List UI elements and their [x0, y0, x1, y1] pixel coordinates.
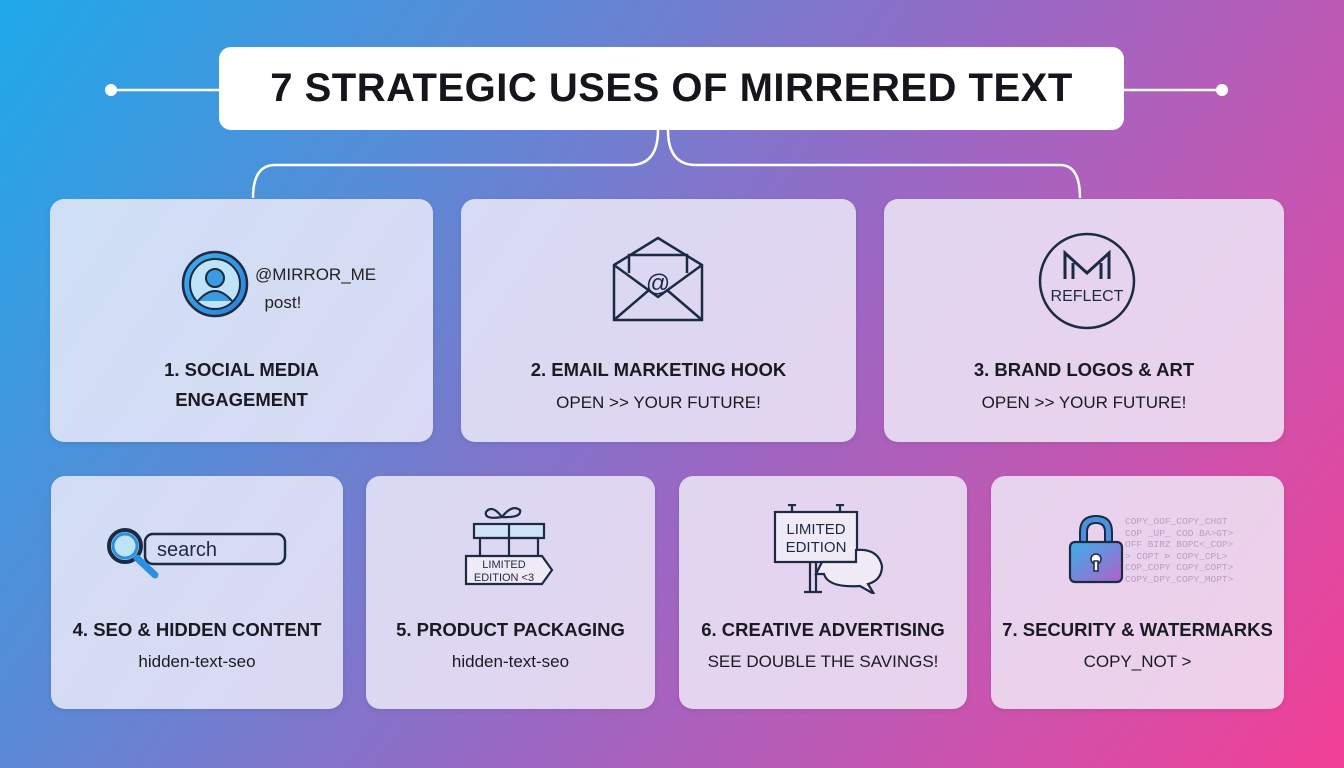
panel: seo — [51, 476, 343, 709]
heading: ENGAGEMENT — [175, 389, 308, 410]
heading: 6. CREATIVE ADVERTISING — [701, 619, 945, 640]
title — [219, 47, 1124, 130]
panel: packaging — [366, 476, 655, 709]
icon: billboard — [774, 504, 884, 594]
text: handle — [255, 265, 376, 312]
text: faded watermark: COP_COPY COPY_COPT> — [1125, 562, 1233, 573]
text: faded watermark: COPY_DPY_COPY_MOPT> — [1125, 574, 1233, 584]
panel: packaging: hidden-text-seo — [452, 652, 569, 671]
icon: billboard: LIMITED — [786, 521, 846, 538]
heading: 4. SEO & HIDDEN CONTENT — [73, 619, 321, 640]
icon: search bar: search — [157, 539, 217, 561]
panel: brand — [884, 199, 1284, 442]
text: faded watermark — [1125, 516, 1233, 584]
text: faded watermark: COPY_OOF_COPY_CHOT — [1125, 516, 1228, 527]
heading: 5. PRODUCT PACKAGING — [396, 619, 625, 640]
icon: billboard: EDITION — [786, 539, 846, 556]
panel: brand: OPEN >> YOUR FUTURE! — [982, 393, 1186, 412]
heading: 1. SOCIAL MEDIA — [164, 359, 319, 380]
icon: logo — [1038, 232, 1136, 330]
panel: advertising: SEE DOUBLE THE SAVINGS! — [708, 652, 938, 671]
icon: gift: EDITION <3 — [474, 572, 534, 584]
panel: email: OPEN >> YOUR FUTURE! — [556, 393, 761, 412]
heading: 7. SECURITY & WATERMARKS — [1002, 619, 1273, 640]
icon: envelope: @ — [646, 270, 670, 297]
heading: 3. BRAND LOGOS & ART — [974, 359, 1194, 380]
panel: security: COPY_NOT > — [1084, 652, 1191, 671]
icon: search bar — [107, 528, 286, 578]
text: faded watermark: > COPT ⊳ COPY_CPL> — [1125, 550, 1228, 562]
heading — [164, 359, 319, 410]
icon: envelope — [612, 236, 704, 322]
panel: seo: hidden-text-seo — [138, 652, 256, 671]
panel: security — [991, 476, 1284, 709]
icon: avatar — [182, 250, 248, 318]
icon: lock — [1068, 515, 1124, 584]
text: faded watermark: COP _UP_ COD BA>GT> — [1125, 528, 1233, 538]
text: handle: @MIRROR_ME — [255, 265, 376, 284]
panel: social media — [50, 199, 433, 442]
title: 7 STRATEGIC USES OF MIRRERED TEXT — [270, 66, 1073, 110]
text: handle: post! — [264, 293, 301, 312]
panel: email — [461, 199, 856, 442]
icon: gift: LIMITED — [482, 559, 526, 571]
heading: 2. EMAIL MARKETING HOOK — [531, 359, 786, 380]
text: faded watermark: OFF BIRZ BOPC<_COP> — [1125, 539, 1233, 550]
icon: logo: REFLECT — [1051, 288, 1124, 305]
icon: gift — [464, 507, 554, 586]
panel: advertising — [679, 476, 967, 709]
